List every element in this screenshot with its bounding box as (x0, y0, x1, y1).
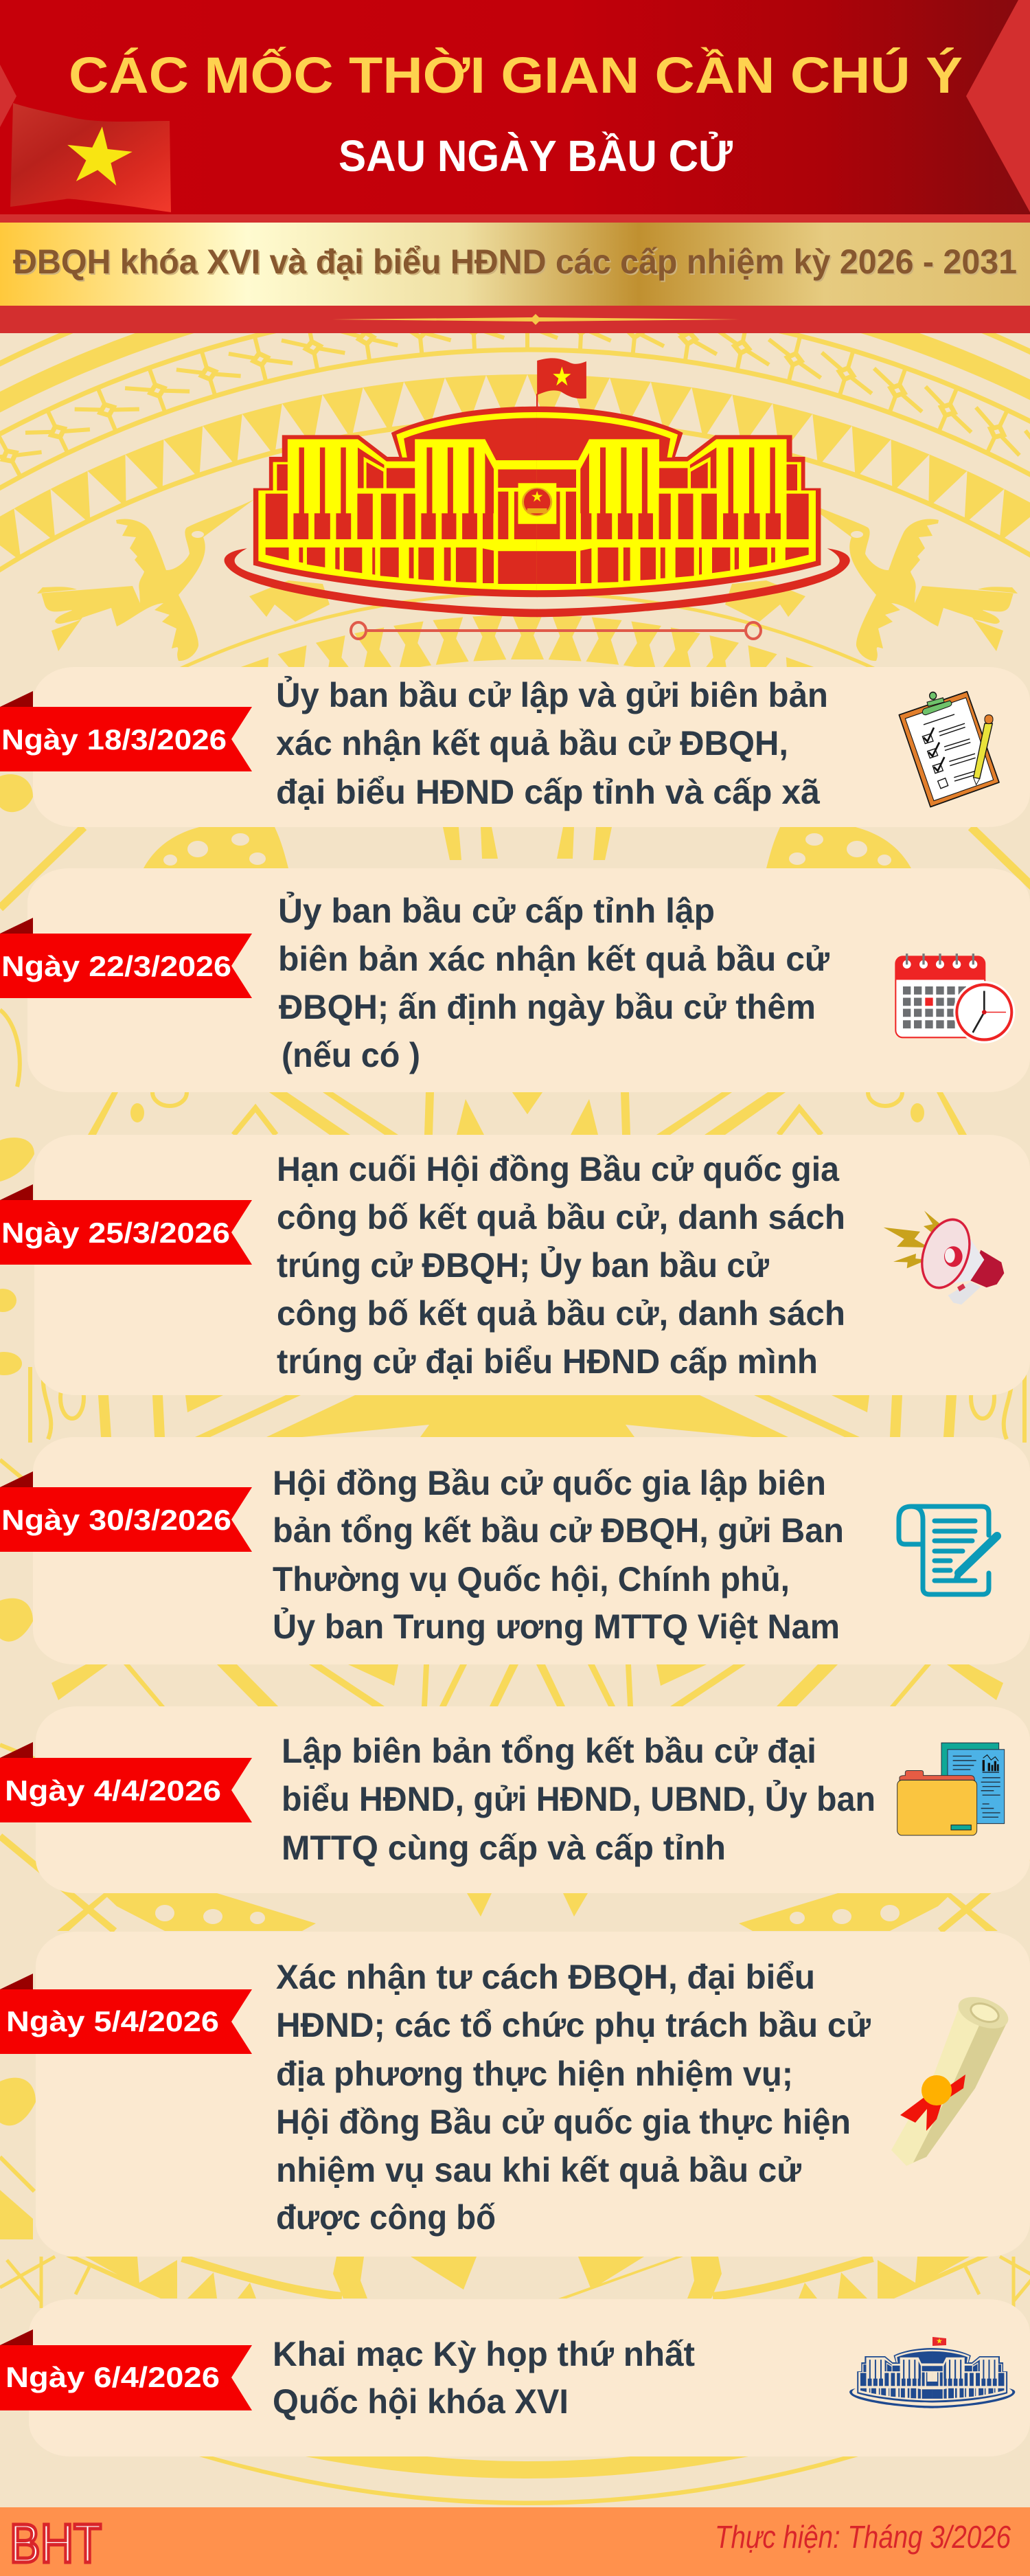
date ribbon: Ngày 22/3/2026 (1, 950, 231, 982)
date ribbon (0, 1742, 252, 1822)
text block (277, 1150, 845, 1381)
date ribbon: Ngày 6/4/2026 (5, 2361, 220, 2393)
icon: diploma scroll (891, 1991, 1013, 2166)
panel: 25/3/2026 (0, 1135, 1030, 1395)
text block: Hội đồng Bầu cử quốc gia lập biên (273, 1464, 826, 1502)
header banner (0, 0, 1030, 214)
national assembly building (225, 358, 850, 617)
panel: 30/3/2026 (0, 1437, 1030, 1664)
logo BHT: BHT (10, 2513, 102, 2574)
text block: Hạn cuối Hội đồng Bầu cử quốc gia (277, 1150, 840, 1188)
icon: clipboard (899, 692, 999, 807)
date ribbon (0, 1184, 252, 1265)
text block: Ủy ban bầu cử lập và gửi biên bản (276, 675, 828, 714)
text block: bản tổng kết bầu cử ĐBQH, gửi Ban (273, 1511, 844, 1550)
text block (273, 2335, 695, 2421)
icon: blue assembly building (849, 2337, 1015, 2408)
text block: (nếu có ) (282, 1036, 420, 1074)
text block: Quốc hội khóa XVI (273, 2382, 569, 2421)
text block: biểu HĐND, gửi HĐND, UBND, Ủy ban (282, 1779, 876, 1818)
date ribbon (0, 918, 252, 998)
text block: Hội đồng Bầu cử quốc gia thực hiện (276, 2103, 851, 2141)
text block: MTTQ cùng cấp và cấp tỉnh (282, 1829, 726, 1867)
date ribbon: Ngày 30/3/2026 (1, 1504, 231, 1536)
footer (0, 2507, 1030, 2576)
text block (278, 891, 830, 1074)
decorative divider with circles (351, 622, 761, 639)
panel: 6/4/2026 (0, 2299, 1030, 2456)
text block: Xác nhận tư cách ĐBQH, đại biểu (276, 1958, 815, 1996)
date ribbon: Ngày 18/3/2026 (1, 723, 227, 756)
panel: 18/3/2026 (0, 667, 1030, 827)
text block: biên bản xác nhận kết quả bầu cử (278, 940, 830, 978)
panel: 4/4/2026 (0, 1706, 1030, 1893)
text block: Thường vụ Quốc hội, Chính phủ, (273, 1560, 790, 1598)
text block: công bố kết quả bầu cử, danh sách (277, 1198, 845, 1236)
date ribbon: Ngày 25/3/2026 (1, 1217, 230, 1249)
text block: đại biểu HĐND cấp tỉnh và cấp xã (276, 773, 820, 811)
text block: nhiệm vụ sau khi kết quả bầu cử (276, 2151, 802, 2189)
text block: Khai mạc Kỳ họp thứ nhất (273, 2335, 695, 2373)
text block: địa phương thực hiện nhiệm vụ; (276, 2055, 793, 2093)
gold subtitle band: ĐBQH khóa XVI và đại biểu HĐND các cấp nhiệm kỳ 2026 - 2031 (13, 242, 1017, 281)
text block (276, 1958, 871, 2237)
icon: folder and reports (897, 1743, 1005, 1835)
text block (282, 1732, 876, 1867)
text block: trúng cử đại biểu HĐND cấp mình (277, 1342, 818, 1381)
text block: xác nhận kết quả bầu cử ĐBQH, (276, 724, 788, 762)
text block (273, 1464, 844, 1646)
date ribbon: Ngày 5/4/2026 (6, 2005, 219, 2037)
icon: calendar and clock (895, 953, 1015, 1043)
text block: HĐND; các tổ chức phụ trách bầu cử (276, 2006, 871, 2044)
date ribbon: Ngày 4/4/2026 (5, 1774, 221, 1807)
text block: ĐBQH; ấn định ngày bầu cử thêm (279, 988, 816, 1026)
date ribbon (0, 1974, 252, 2054)
date ribbon (0, 691, 252, 771)
gold subtitle band (0, 214, 1030, 333)
date ribbon (0, 1471, 252, 1552)
panel: 5/4/2026 (0, 1932, 1030, 2257)
emblem (518, 483, 556, 524)
text block: trúng cử ĐBQH; Ủy ban bầu cử (277, 1245, 770, 1285)
text block: công bố kết quả bầu cử, danh sách (277, 1294, 845, 1333)
text block: Ủy ban Trung ương MTTQ Việt Nam (273, 1607, 840, 1646)
icon: megaphone (884, 1210, 1004, 1304)
flag on building (536, 358, 586, 407)
text block: Ủy ban bầu cử cấp tỉnh lập (278, 891, 715, 930)
panel: 22/3/2026 (0, 868, 1030, 1092)
text block (276, 675, 828, 811)
icon: document and pen (899, 1506, 997, 1594)
subtitle: SAU NGÀY BẦU CỬ (339, 131, 733, 181)
date ribbon (0, 2329, 252, 2410)
text block: được công bố (276, 2198, 496, 2237)
text block: Lập biên bản tổng kết bầu cử đại (282, 1732, 816, 1770)
title: CÁC MỐC THỜI GIAN CẦN CHÚ Ý (69, 47, 963, 104)
icon: waving flag (10, 103, 171, 212)
